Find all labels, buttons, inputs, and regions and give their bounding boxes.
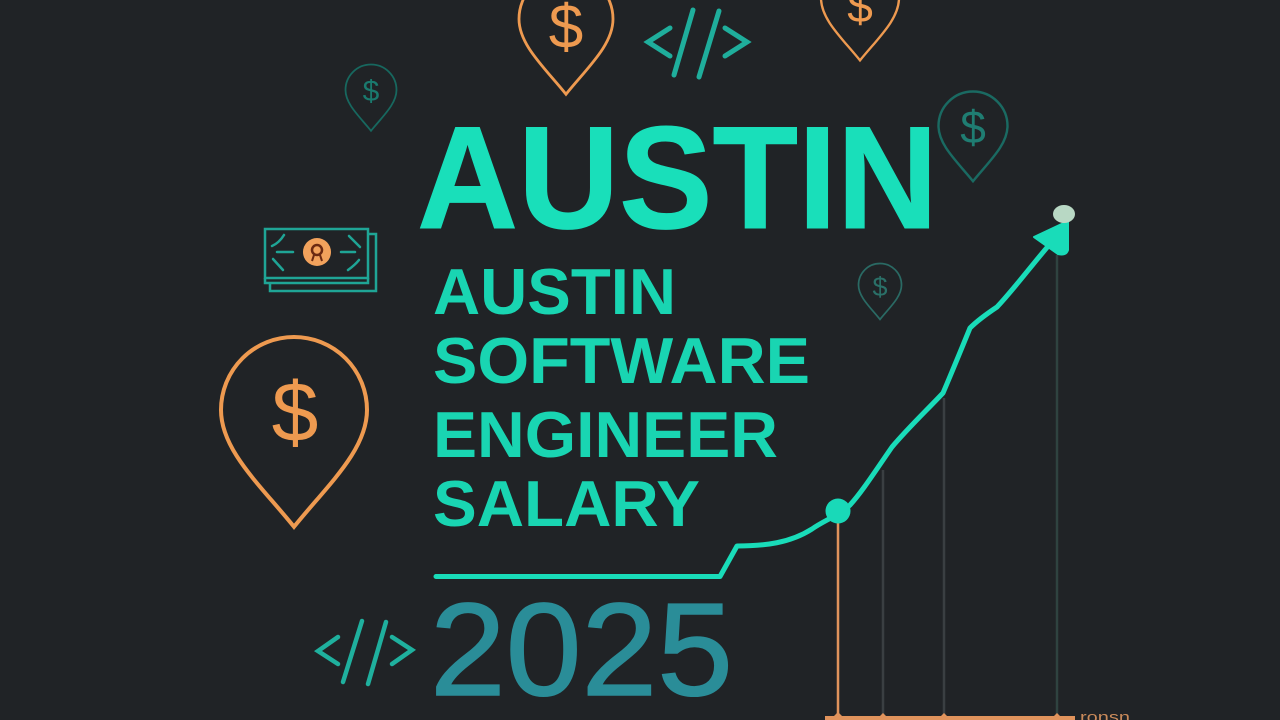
title: AUSTIN: AUSTIN bbox=[417, 96, 938, 259]
chart arrow: line head bbox=[1034, 221, 1068, 254]
heading: Austin Software Engineer Salary: ENGINEER bbox=[433, 398, 778, 471]
icon: teal location pin right of title bbox=[938, 92, 1008, 181]
chart line: rising trend bbox=[436, 244, 1050, 576]
heading: Austin Software Engineer Salary: SOFTWARE bbox=[433, 324, 810, 397]
icon: bottom code brackets bbox=[318, 621, 412, 684]
chart bars: vertical guide lines bbox=[838, 255, 1057, 716]
icon: small teal location pin left bbox=[346, 64, 396, 131]
chart marker: end point bbox=[1053, 205, 1075, 223]
icon: stack of banknotes bbox=[265, 229, 376, 291]
icon: small teal location pin left: $ bbox=[363, 75, 380, 108]
icon: large orange location pin: $ bbox=[272, 365, 318, 459]
year: 2025: 2025 bbox=[430, 576, 733, 720]
icon: top right orange location pin bbox=[821, 0, 899, 60]
heading: Austin Software Engineer Salary: SALARY bbox=[433, 467, 700, 540]
heading: Austin Software Engineer Salary: AUSTIN bbox=[433, 255, 676, 328]
chart: salary growth line bbox=[436, 205, 1130, 720]
chart axis: orange baseline with ticks bbox=[825, 712, 1075, 720]
icon: small teal location pin middle: $ bbox=[872, 272, 888, 302]
icon: teal location pin right of title: $ bbox=[960, 101, 986, 153]
icon: top code brackets bbox=[648, 10, 747, 77]
icon: small teal location pin middle bbox=[858, 264, 902, 319]
heading: Austin Software Engineer Salary bbox=[433, 255, 810, 540]
icon: top orange location pin bbox=[519, 0, 613, 94]
icon: large orange location pin bbox=[221, 337, 367, 527]
chart marker: data point bbox=[826, 498, 850, 524]
